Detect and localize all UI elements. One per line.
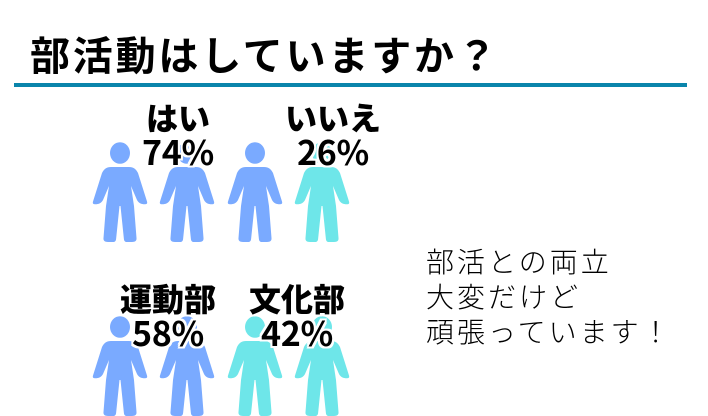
person: yes 3 <box>228 142 282 242</box>
person: culture 2 <box>295 316 349 416</box>
person: culture 1 <box>228 316 282 416</box>
label: no: いいえ <box>285 94 381 140</box>
person: yes 2 <box>160 142 214 242</box>
value: yes: 74% <box>142 126 214 175</box>
value: no: 26% <box>297 126 369 175</box>
person: sports 1 <box>93 316 147 416</box>
title underline <box>14 83 687 87</box>
person: sports 2 <box>160 316 214 416</box>
value: culture club: 42% <box>261 307 333 356</box>
comment text: 大変だけど <box>426 276 581 316</box>
label: culture club: 文化部 <box>249 275 345 321</box>
comment text <box>426 241 673 351</box>
person: no <box>295 142 349 242</box>
label: yes: はい <box>146 94 210 140</box>
comment text: 頑張っています！ <box>426 311 673 351</box>
value: sports club: 58% <box>132 307 204 356</box>
person: yes 1 <box>93 142 147 242</box>
comment text: 部活との両立 <box>426 241 612 281</box>
label: sports club: 運動部 <box>120 275 216 321</box>
title: 部活動はしていますか？ <box>30 24 500 82</box>
